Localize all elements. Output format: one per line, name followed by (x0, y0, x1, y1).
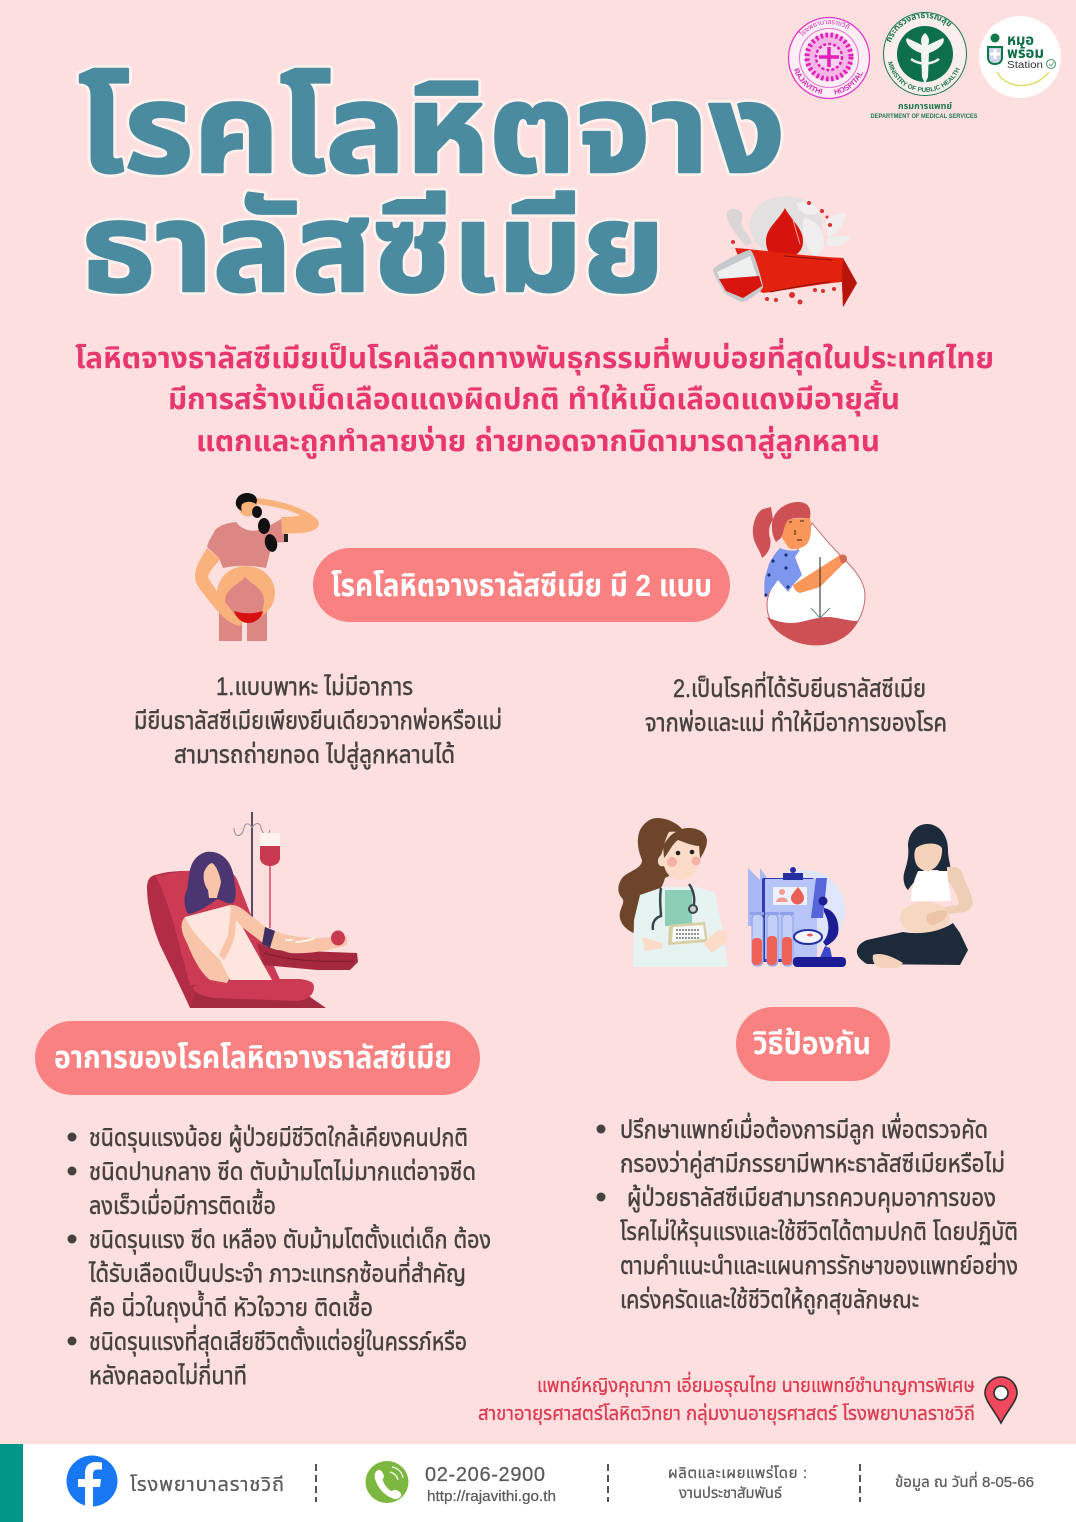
logo: Rajavithi Hospital: โรงพยาบาลราชวิถี (798, 20, 850, 36)
logo: Mor Prom Station: Station (1007, 60, 1043, 71)
intro text (75, 337, 994, 459)
intro text: มีการสร้างเม็ดเลือดแดงผิดปกติ ทำให้เม็ดเลือดแดงมีอายุสั้น (168, 379, 900, 416)
title: โรคโลหิตจาง (78, 61, 785, 199)
footer: phone and website: http://rajavithi.go.th (427, 1489, 556, 1505)
text: type 2 disease: จากพ่อและแม่ ทำให้มีอาการของโรค (645, 709, 947, 737)
list: symptoms (68, 1124, 491, 1390)
list: symptoms: ชนิดรุนแรงน้อย ผู้ป่วยมีชีวิตใกล้เคียงคนปกติ (89, 1124, 468, 1153)
footer: produced by: งานประชาสัมพันธ์ (679, 1485, 782, 1502)
list: prevention: ผู้ป่วยธาลัสซีเมียสามารถควบคุมอาการของ (627, 1184, 996, 1213)
list: symptoms: ชนิดรุนแรง ซีด เหลือง ตับม้ามโตตั้งแต่เด็ก ต้อง (89, 1223, 491, 1255)
title (78, 61, 785, 318)
title: ธาลัสซีเมีย (81, 180, 665, 318)
logo: Rajavithi Hospital: RAJAVITHI (794, 68, 822, 94)
list: prevention: ตามคำแนะนำและแผนการรักษาของแพทย์อย่าง (620, 1252, 1018, 1280)
icon: blood bag and ribbon (713, 196, 857, 307)
logo: Rajavithi Hospital (788, 16, 870, 100)
title: โรคโลหิตจาง (78, 61, 785, 199)
icon: facebook (66, 1456, 118, 1507)
list: symptoms: ชนิดปานกลาง ซีด ตับม้ามโตไม่มากแต่อาจซีด (89, 1158, 476, 1186)
credit: physician: สาขาอายุรศาสตร์โลหิตวิทยา กลุ่มงานอายุรศาสตร์ โรงพยาบาลราชวิถี (478, 1402, 975, 1425)
logo: Mor Prom Station: หมอ (1007, 32, 1034, 49)
list: prevention: ปรึกษาแพทย์เมื่อต้องการมีลูก เพื่อตรวจคัด (620, 1112, 988, 1145)
pill heading: prevention: วิธีป้องกัน (753, 1026, 871, 1061)
logo: Ministry of Public Health: กระทรวงสาธารณสุข (886, 13, 952, 42)
icon: location pin (985, 1377, 1017, 1423)
logo: Ministry of Public Health: DEPARTMENT OF MEDICAL SERVICES (870, 114, 978, 120)
list: prevention: กรองว่าคู่สามีภรรยามีพาหะธาลัสซีเมียหรือไม่ (620, 1150, 1005, 1179)
list: symptoms: หลังคลอดไม่กี่นาที (89, 1358, 247, 1390)
footer bar (0, 1444, 1076, 1522)
footer: produced by (668, 1464, 807, 1502)
illustration: pregnant woman seated (857, 824, 973, 968)
pill heading: symptoms: อาการของโรคโลหิตจางธาลัสซีเมีย (54, 1040, 452, 1075)
list: prevention: โรคไม่ให้รุนแรงและใช้ชีวิตได้ตามปกติ โดยปฏิบัติ (620, 1218, 1018, 1247)
list: symptoms: ชนิดรุนแรงที่สุดเสียชีวิตตั้งแต่อยู่ในครรภ์หรือ (89, 1324, 467, 1357)
list: symptoms: ได้รับเลือดเป็นประจำ ภาวะแทรกซ้อนที่สำคัญ (88, 1256, 466, 1288)
list: symptoms: ลงเร็วเมื่อมีการติดเชื้อ (89, 1188, 276, 1220)
pill heading: two types: โรคโลหิตจางธาลัสซีเมีย มี 2 แบบ (331, 568, 712, 603)
pill heading: two types (313, 548, 730, 622)
credit: physician (478, 1371, 975, 1425)
text: type 1 carrier: มียีนธาลัสซีเมียเพียงยีนเดียวจากพ่อหรือแม่ (134, 707, 502, 735)
footer: facebook name: โรงพยาบาลราชวิถี (130, 1474, 284, 1496)
illustration: blood transfusion (147, 812, 358, 1008)
list: prevention (596, 1112, 1018, 1315)
text: type 2 disease: 2.เป็นโรคที่ได้รับยีนธาลัสซีเมีย (673, 671, 926, 703)
illustration: doctor (618, 818, 728, 967)
text: type 2 disease (645, 671, 947, 737)
logo: Rajavithi Hospital: HOSPITAL (834, 72, 863, 94)
logo: Mor Prom Station (979, 16, 1061, 98)
text: type 1 carrier (134, 673, 502, 770)
illustration: pregnant woman with anaemia (195, 493, 319, 641)
intro text: โลหิตจางธาลัสซีเมียเป็นโรคเลือดทางพันธุกรรมที่พบบ่อยที่สุดในประเทศไทย (75, 337, 994, 375)
intro text: แตกและถูกทำลายง่าย ถ่ายทอดจากบิดามารดาสู่ลูกหลาน (196, 426, 880, 459)
credit: physician: แพทย์หญิงคุณาภา เอี่ยมอรุณไทย นายแพทย์ชำนาญการพิเศษ (537, 1371, 975, 1397)
logo: Mor Prom Station: พร้อม (1007, 44, 1044, 62)
footer: produced by: ผลิตและเผยแพร่โดย : (668, 1464, 807, 1482)
list: symptoms: คือ นิ่วในถุงน้ำดี หัวใจวาย ติดเชื้อ (89, 1290, 373, 1323)
title: ธาลัสซีเมีย (81, 180, 665, 318)
icon: phone (366, 1461, 408, 1503)
pill heading: prevention (736, 1007, 890, 1081)
text: type 1 carrier: 1.แบบพาหะ ไม่มีอาการ (216, 673, 413, 701)
footer: date: ข้อมูล ณ วันที่ 8-05-66 (895, 1471, 1034, 1491)
illustration: girl with blood drop (753, 502, 865, 645)
text: type 1 carrier: สามารถถ่ายทอด ไปสู่ลูกหลานได้ (174, 741, 455, 770)
footer: phone and website: 02-206-2900 (425, 1464, 545, 1486)
footer: phone and website (425, 1464, 556, 1505)
list: prevention: เคร่งครัดและใช้ชีวิตให้ถูกสุขลักษณะ (620, 1286, 919, 1315)
logo: Ministry of Public Health (870, 12, 978, 120)
illustration: lab microscope and tubes (748, 867, 846, 967)
pill heading: symptoms (35, 1021, 480, 1095)
logo: Ministry of Public Health: MINISTRY OF PUBLIC HEALTH (888, 61, 960, 92)
logo: Ministry of Public Health: กรมการแพทย์ (898, 101, 952, 111)
